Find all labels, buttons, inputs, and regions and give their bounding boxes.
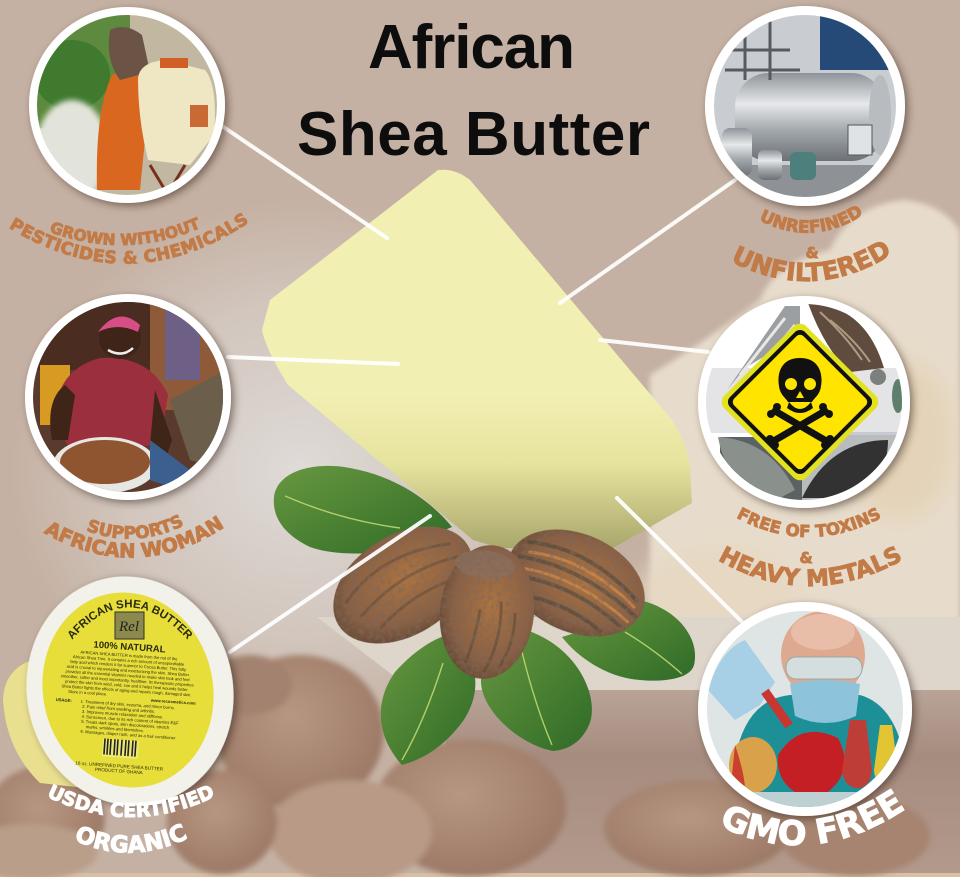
label text: www.recosmetics.com	[150, 698, 196, 706]
leaf: upper left	[274, 466, 452, 554]
caption: free of toxins and heavy metals: FREE OF TOXINS	[736, 506, 880, 538]
connector lines	[222, 126, 742, 652]
shea nuts	[312, 502, 662, 684]
label text	[55, 600, 196, 775]
label text: smoother, softer and most importantly, healthier. Its therapeutic properties	[61, 673, 194, 688]
caption: unrefined and unfiltered: UNFILTERED	[734, 242, 889, 282]
barcode	[102, 738, 139, 759]
caption: free of toxins and heavy metals: &	[799, 549, 813, 567]
label text: protect the skin from wind, cold, sun and it helps heal wounds faster.	[65, 679, 189, 692]
tub lid	[5, 557, 255, 825]
label text: 100% NATURAL	[93, 639, 166, 655]
leaf: lower left	[381, 635, 475, 765]
photo circle: African woman making shea butter	[25, 294, 231, 500]
product tub of shea butter	[3, 574, 242, 813]
nut: centre	[433, 540, 541, 684]
title	[297, 13, 650, 169]
photo circle: GMO scientist	[698, 602, 912, 817]
caption: free of toxins and heavy metals	[718, 506, 901, 587]
caption: GMO free: GMO FREE	[723, 788, 905, 846]
label text: 5. Treats dark spots, skin discolorations, stretch	[81, 719, 170, 730]
label text: 6. Massages, diaper rash, and as a hair conditioner	[80, 729, 176, 740]
label text: 1. Treatment of dry skin, eczema, and minor burns.	[80, 699, 175, 710]
warning diamond	[718, 320, 882, 484]
label text: 2. Pain relief from swelling and arthritis.	[82, 704, 155, 714]
label text: provides all the essential vitamins needed to make skin look and feel	[65, 669, 190, 682]
leaf: right	[562, 600, 695, 681]
caption: free of toxins and heavy metals: HEAVY METALS	[718, 546, 901, 587]
title: Shea Butter	[297, 100, 650, 169]
photo circle: toxins warning sign	[698, 296, 910, 508]
label text: Shea Butter fights the effects of aging and repairs rough, damaged skin.	[61, 683, 192, 697]
tub body	[3, 660, 85, 788]
caption: USDA certified organic: ORGANIC	[76, 824, 188, 854]
caption: unrefined and unfiltered	[734, 206, 889, 282]
photo circle: refinery equipment	[705, 6, 905, 206]
caption: unrefined and unfiltered: UNREFINED	[761, 206, 862, 234]
label text: 3. Improves muscle relaxation and stiffness.	[82, 709, 163, 719]
caption: supports African woman: SUPPORTS	[86, 514, 183, 540]
skull and crossbones	[766, 358, 834, 449]
background shea nuts	[0, 655, 930, 877]
yellow label	[24, 576, 232, 804]
label text: 4. Sunscreen, due to its rich content of vitamins E&F	[81, 714, 179, 726]
label text: AFRICAN SHEA BUTTER	[68, 600, 192, 640]
leaf: lower centre	[481, 628, 592, 751]
caption: USDA certified organic: USDA CERTIFIED	[49, 784, 213, 818]
label text: USAGE:	[55, 697, 72, 703]
label text: AFRICAN SHEA BUTTER is made from the nut of the	[80, 650, 178, 661]
caption: unrefined and unfiltered: &	[805, 244, 819, 262]
caption: grown without pesticides and chemicals: PESTICIDES & CHEMICALS	[9, 212, 248, 264]
label text: fatty acid which renders it far superior to Cocoa Butter. This fatty	[70, 659, 187, 672]
label text: acid is crucial to rejuvenating and moisturizing the skin. Shea Butter	[67, 664, 190, 677]
label text: marks, wrinkles and blemishes.	[86, 724, 144, 733]
caption: grown without pesticides and chemicals: GROWN WITHOUT	[50, 216, 198, 246]
photo circle: farmer spraying	[29, 7, 225, 203]
label text: Store in a cool place.	[68, 689, 107, 697]
block of shea butter	[262, 170, 692, 548]
nut: left	[312, 502, 494, 668]
label text: African Shea Tree. It contains a rich amount of unsaponifiable	[73, 654, 185, 667]
nut: right	[490, 509, 662, 657]
label text: PRODUCT OF GHANA	[95, 767, 144, 775]
caption: USDA certified organic	[49, 784, 213, 854]
label text: Rel	[118, 619, 139, 635]
caption: supports African woman: AFRICAN WOMAN	[42, 515, 224, 558]
title: African	[368, 13, 575, 82]
leaves	[274, 466, 695, 765]
label text: 16 oz. UNREFINED PURE SHEA BUTTER	[75, 760, 164, 772]
